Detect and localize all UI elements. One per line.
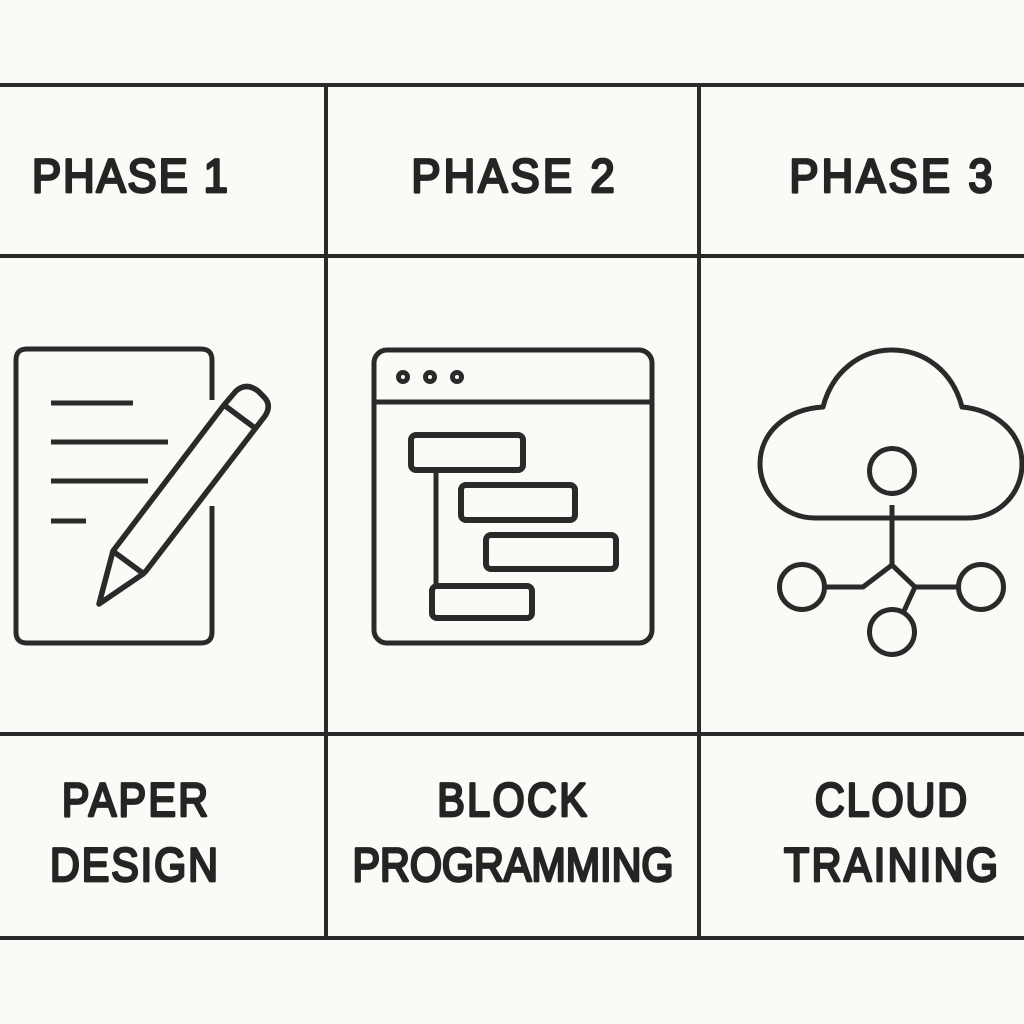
heading: phase 1: PHASE 1: [32, 149, 228, 202]
label: paper design: PAPER: [62, 774, 208, 827]
label: cloud training: TRAINING: [784, 839, 998, 892]
label: cloud training: CLOUD: [815, 774, 967, 827]
label: paper design: [50, 774, 218, 892]
heading: phase 2: PHASE 2: [411, 149, 615, 202]
icon: block programming window: [374, 350, 652, 643]
icon: paper and pencil: [16, 349, 268, 643]
label: cloud training: [784, 774, 998, 892]
label: block programming: PROGRAMMING: [352, 839, 674, 892]
icon: cloud network: [760, 350, 1022, 654]
label: block programming: BLOCK: [437, 774, 587, 827]
label: paper design: DESIGN: [50, 839, 218, 892]
label: block programming: [352, 774, 674, 892]
heading: phase 3: PHASE 3: [789, 149, 993, 202]
